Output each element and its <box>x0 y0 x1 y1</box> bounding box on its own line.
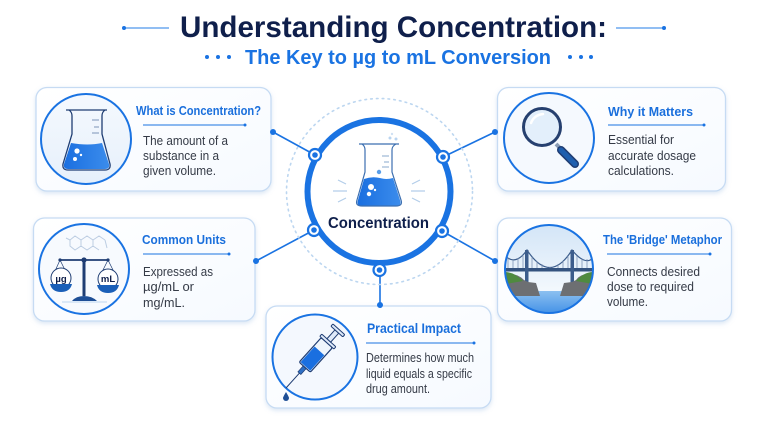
central hub <box>286 98 472 284</box>
panel: why it matters <box>498 88 726 191</box>
body text: Essential for <box>608 133 674 147</box>
body text: volume. <box>607 295 648 309</box>
panel: what is concentration <box>36 88 271 191</box>
panel: bridge metaphor <box>498 218 732 321</box>
body text: calculations. <box>608 164 674 178</box>
body text <box>607 265 700 309</box>
body text: mg/mL. <box>143 296 185 310</box>
connector lines <box>253 129 498 308</box>
panel: practical impact <box>266 306 491 408</box>
body text: substance in a <box>143 149 219 163</box>
icon: syringe <box>272 314 358 401</box>
scale labels: µg <box>55 274 67 285</box>
heading: What is Concentration? <box>136 104 261 118</box>
panel: common units <box>34 218 255 321</box>
heading: Practical Impact <box>367 320 461 336</box>
body text: liquid equals a specific <box>366 367 472 381</box>
icon: magnifying glass <box>504 93 594 183</box>
body text <box>143 134 228 178</box>
title: Understanding Concentration: <box>180 11 607 44</box>
heading: Common Units <box>142 233 226 247</box>
icon: bridge <box>505 225 593 315</box>
body text: Determines how much <box>366 351 474 365</box>
heading: The 'Bridge' Metaphor <box>603 233 722 247</box>
body text: accurate dosage <box>608 149 696 163</box>
heading: Why it Matters <box>608 105 693 119</box>
body text: Connects desired <box>607 265 700 279</box>
body text <box>143 265 213 310</box>
body text <box>366 351 474 396</box>
icon: central flask <box>333 133 425 206</box>
body text: µg/mL or <box>143 280 194 294</box>
scale labels: mL <box>101 274 115 285</box>
body text: dose to required <box>607 280 694 294</box>
icon: flask <box>41 94 131 184</box>
body text: Expressed as <box>143 265 213 279</box>
body text <box>608 133 696 178</box>
scale labels <box>55 274 115 285</box>
body text: given volume. <box>143 164 216 178</box>
subtitle: The Key to µg to mL Conversion <box>245 47 551 69</box>
hub label: Concentration <box>328 215 429 232</box>
icon: balance scale <box>39 224 129 314</box>
body text: The amount of a <box>143 134 228 148</box>
body text: drug amount. <box>366 382 430 396</box>
